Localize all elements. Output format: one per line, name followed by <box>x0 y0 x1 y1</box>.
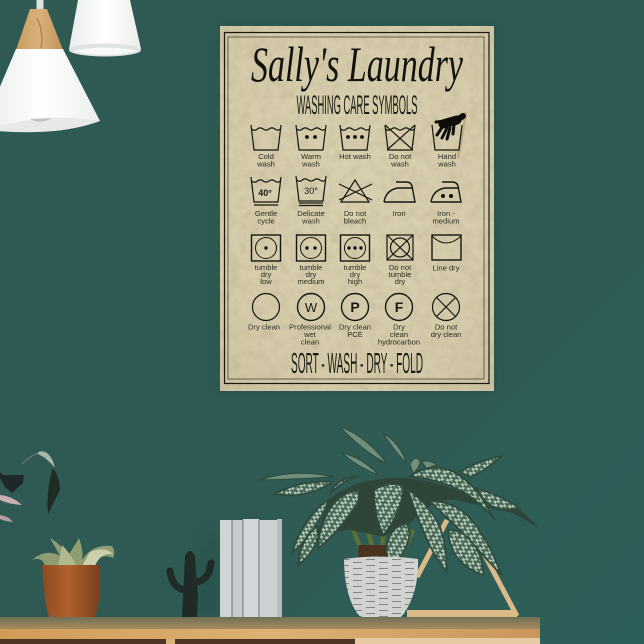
wooden triangle stand <box>407 520 517 616</box>
book stack <box>220 519 282 620</box>
icon: dry clean PCE: P <box>350 299 360 315</box>
label: cold wash: wash <box>256 160 275 168</box>
label: do not tumble dry: tumble <box>389 270 411 279</box>
soil stalks <box>358 545 387 558</box>
icon: delicate wash 30: 30° <box>304 186 318 196</box>
label: tumble dry medium: medium <box>297 277 325 286</box>
label: tumble dry low: dry <box>261 270 271 279</box>
poster shadow <box>219 25 497 393</box>
label: dry clean PCE: Dry clean <box>339 322 371 332</box>
label: tumble dry low: tumble <box>255 263 277 272</box>
label: warm wash: wash <box>301 160 320 168</box>
paper grain <box>220 26 494 391</box>
label: delicate wash: Delicate <box>297 209 325 218</box>
icon: hand wash tub <box>432 125 462 150</box>
pendant lamp: small <box>69 0 141 56</box>
row 2: temperature, bleach, iron <box>251 176 461 226</box>
pendant lamp: large with wooden cap <box>0 0 100 132</box>
label: cold wash: Cold <box>258 152 274 161</box>
label: dry clean hydrocarbon: Dry <box>393 322 405 332</box>
icon: dry clean hydrocarbon: F <box>395 299 404 315</box>
icon: cold wash <box>251 125 281 150</box>
label: dry clean PCE: PCE <box>347 330 363 339</box>
pale variegated leaves <box>275 456 520 575</box>
shadow behind books <box>195 525 220 618</box>
icon: iron <box>384 182 415 202</box>
label: gentle cycle: Gentle <box>255 209 277 218</box>
icon: do not dry clean <box>432 294 460 320</box>
dark central foliage <box>317 478 540 537</box>
icon: do not wash <box>385 125 415 150</box>
label: do not dry clean: Do not <box>435 322 457 332</box>
label: hand wash: Hand <box>438 152 456 161</box>
label: professional wet clean: wet <box>303 330 317 339</box>
label: do not tumble dry: Do not <box>389 263 411 272</box>
icon: hot wash <box>340 125 370 150</box>
icon: line dry <box>432 235 461 260</box>
label: gentle cycle: cycle <box>257 216 275 226</box>
label: professional wet clean: Professional <box>289 322 331 332</box>
hanging plant left <box>0 451 60 522</box>
small plant in terracotta pot <box>32 538 114 625</box>
label: dry clean hydrocarbon: hydrocarbon <box>378 338 420 346</box>
label: iron medium: Iron - <box>437 209 455 218</box>
label: do not bleach: Do not <box>344 209 366 218</box>
icon: iron medium <box>431 182 461 202</box>
icon: dry clean <box>252 294 280 320</box>
label: tumble dry high: tumble <box>344 263 366 272</box>
label: do not tumble dry: dry <box>395 277 405 286</box>
poster <box>219 25 497 393</box>
label: tumble dry low: low <box>260 277 272 286</box>
icon: tumble dry high <box>340 235 370 261</box>
icon: warm wash <box>296 125 326 150</box>
shelf <box>0 617 540 644</box>
icon: dry clean hydrocarbon <box>386 294 412 320</box>
aglaonema plant <box>260 427 540 575</box>
label: delicate wash: wash <box>301 216 320 226</box>
label: do not wash: Do not <box>389 152 411 161</box>
label: professional wet clean: clean <box>301 338 319 346</box>
row 4: dry clean <box>248 294 461 346</box>
icon: do not tumble dry <box>387 235 413 260</box>
label: line dry: Line dry <box>432 264 460 272</box>
label: iron medium: medium <box>432 216 460 226</box>
label: hot wash: Hot wash <box>339 152 371 161</box>
label: do not bleach: bleach <box>344 216 366 226</box>
paper stain <box>458 112 466 158</box>
thin top leaves <box>260 427 437 480</box>
birch white pot <box>344 556 418 623</box>
stems <box>350 520 413 557</box>
icon: delicate wash 30 <box>296 176 326 206</box>
icon: tumble dry medium <box>296 235 326 261</box>
icon: professional wet clean: W <box>305 300 318 315</box>
icon: black hand <box>436 116 463 139</box>
label: do not wash: wash <box>390 160 409 168</box>
label: iron: Iron <box>392 209 406 218</box>
row 3: tumble dry <box>252 235 461 286</box>
icon: dry clean PCE <box>342 294 368 320</box>
cactus figurine <box>170 551 211 618</box>
poster: WASHING CARE SYMBOLS <box>296 90 418 120</box>
label: hand wash: wash <box>437 160 456 168</box>
double border <box>224 32 489 384</box>
label: dry clean hydrocarbon: clean <box>390 330 408 339</box>
icon: tumble dry low <box>252 235 280 261</box>
label: tumble dry high: high <box>348 277 362 286</box>
label: tumble dry high: dry <box>350 270 360 279</box>
row 1: washing <box>251 116 463 168</box>
poster paper <box>220 26 494 391</box>
label: dry clean: Dry clean <box>248 322 280 332</box>
label: warm wash: Warm <box>301 152 321 161</box>
label: do not dry clean: dry clean <box>431 330 461 339</box>
label: tumble dry medium: dry <box>306 270 316 279</box>
icon: gentle cycle 40 <box>251 177 281 205</box>
title: Sally's Laundry <box>251 36 464 92</box>
label: tumble dry medium: tumble <box>300 263 322 272</box>
icon: do not bleach <box>339 180 372 202</box>
icon: professional wet clean <box>298 294 324 320</box>
icon: gentle cycle 40: 40° <box>258 188 272 198</box>
